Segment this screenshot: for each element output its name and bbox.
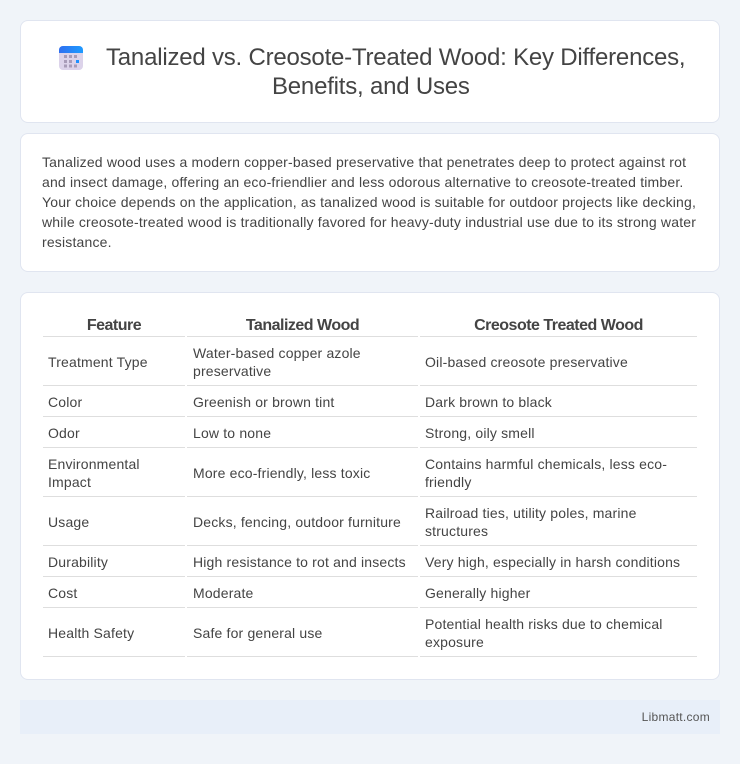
- row: treatment type: Water-based copper azole: [193, 345, 361, 361]
- column headings: Tanalized Wood: [246, 317, 359, 334]
- row: durability: Durability: [48, 554, 108, 570]
- text block: introduction: resistance.: [42, 234, 112, 250]
- row: treatment type: [48, 345, 628, 379]
- panel: header card: [20, 20, 720, 123]
- row: odor: Low to none: [193, 425, 271, 441]
- row: environmental impact: Impact: [48, 474, 91, 490]
- title: Tanalized vs. Creosote-Treated Wood: Key Differences,: [106, 44, 685, 71]
- row: durability: High resistance to rot and insects: [193, 554, 406, 570]
- row: cost: Cost: [48, 585, 77, 601]
- row: odor: Odor: [48, 425, 80, 441]
- title: Benefits, and Uses: [272, 73, 470, 100]
- row: color: Greenish or brown tint: [193, 394, 334, 410]
- column headings: [87, 317, 643, 334]
- row: usage: Usage: [48, 514, 89, 530]
- row: environmental impact: Contains harmful chemicals, less eco-: [425, 456, 667, 472]
- footer bar: [20, 700, 720, 734]
- row: cost: Moderate: [193, 585, 254, 601]
- row: color: Dark brown to black: [425, 394, 552, 410]
- row: environmental impact: More eco-friendly, less toxic: [193, 465, 370, 481]
- text block: introduction: Your choice depends on the application, as tanalized wood is suitable for outdoor projects like decking,: [42, 194, 696, 210]
- panel: comparison table card: [20, 292, 720, 680]
- row: treatment type: Oil-based creosote preservative: [425, 354, 628, 370]
- text block: introduction: while creosote-treated wood is traditionally favored for heavy-duty industrial use due to its strong water: [42, 214, 696, 230]
- row: treatment type: preservative: [193, 363, 271, 379]
- row: health safety: Health Safety: [48, 625, 134, 641]
- text block: introduction: [42, 154, 696, 250]
- title: [106, 44, 685, 100]
- row: durability: [48, 554, 680, 570]
- row: health safety: exposure: [425, 634, 484, 650]
- row: usage: Decks, fencing, outdoor furniture: [193, 514, 401, 530]
- row: treatment type: Treatment Type: [48, 354, 148, 370]
- panel: introduction card: [20, 133, 720, 272]
- comparison table: [43, 317, 697, 657]
- row: cost: Generally higher: [425, 585, 530, 601]
- footer credit: Libmatt.com: [642, 710, 710, 724]
- column headings: Creosote Treated Wood: [474, 317, 643, 334]
- text block: introduction: Tanalized wood uses a modern copper-based preservative that penetrates deep to protect against rot: [42, 154, 686, 170]
- row: environmental impact: Environmental: [48, 456, 140, 472]
- row: usage: Railroad ties, utility poles, marine: [425, 505, 637, 521]
- row: health safety: Potential health risks due to chemical: [425, 616, 663, 632]
- row: color: Color: [48, 394, 82, 410]
- row: health safety: Safe for general use: [193, 625, 322, 641]
- row: usage: structures: [425, 523, 488, 539]
- row: durability: Very high, especially in harsh conditions: [425, 554, 680, 570]
- icon: calendar: [59, 46, 83, 70]
- row: cost: [48, 585, 530, 601]
- row: color: [48, 394, 552, 410]
- row: odor: [48, 425, 535, 441]
- row: usage: [48, 505, 637, 539]
- text block: introduction: and insect damage, offering an eco-friendlier and less odorous alternative to creosote-treated timber.: [42, 174, 683, 190]
- row: health safety: [48, 616, 663, 650]
- row: environmental impact: friendly: [425, 474, 472, 490]
- row: odor: Strong, oily smell: [425, 425, 535, 441]
- column headings: Feature: [87, 317, 141, 334]
- row: environmental impact: [48, 456, 667, 490]
